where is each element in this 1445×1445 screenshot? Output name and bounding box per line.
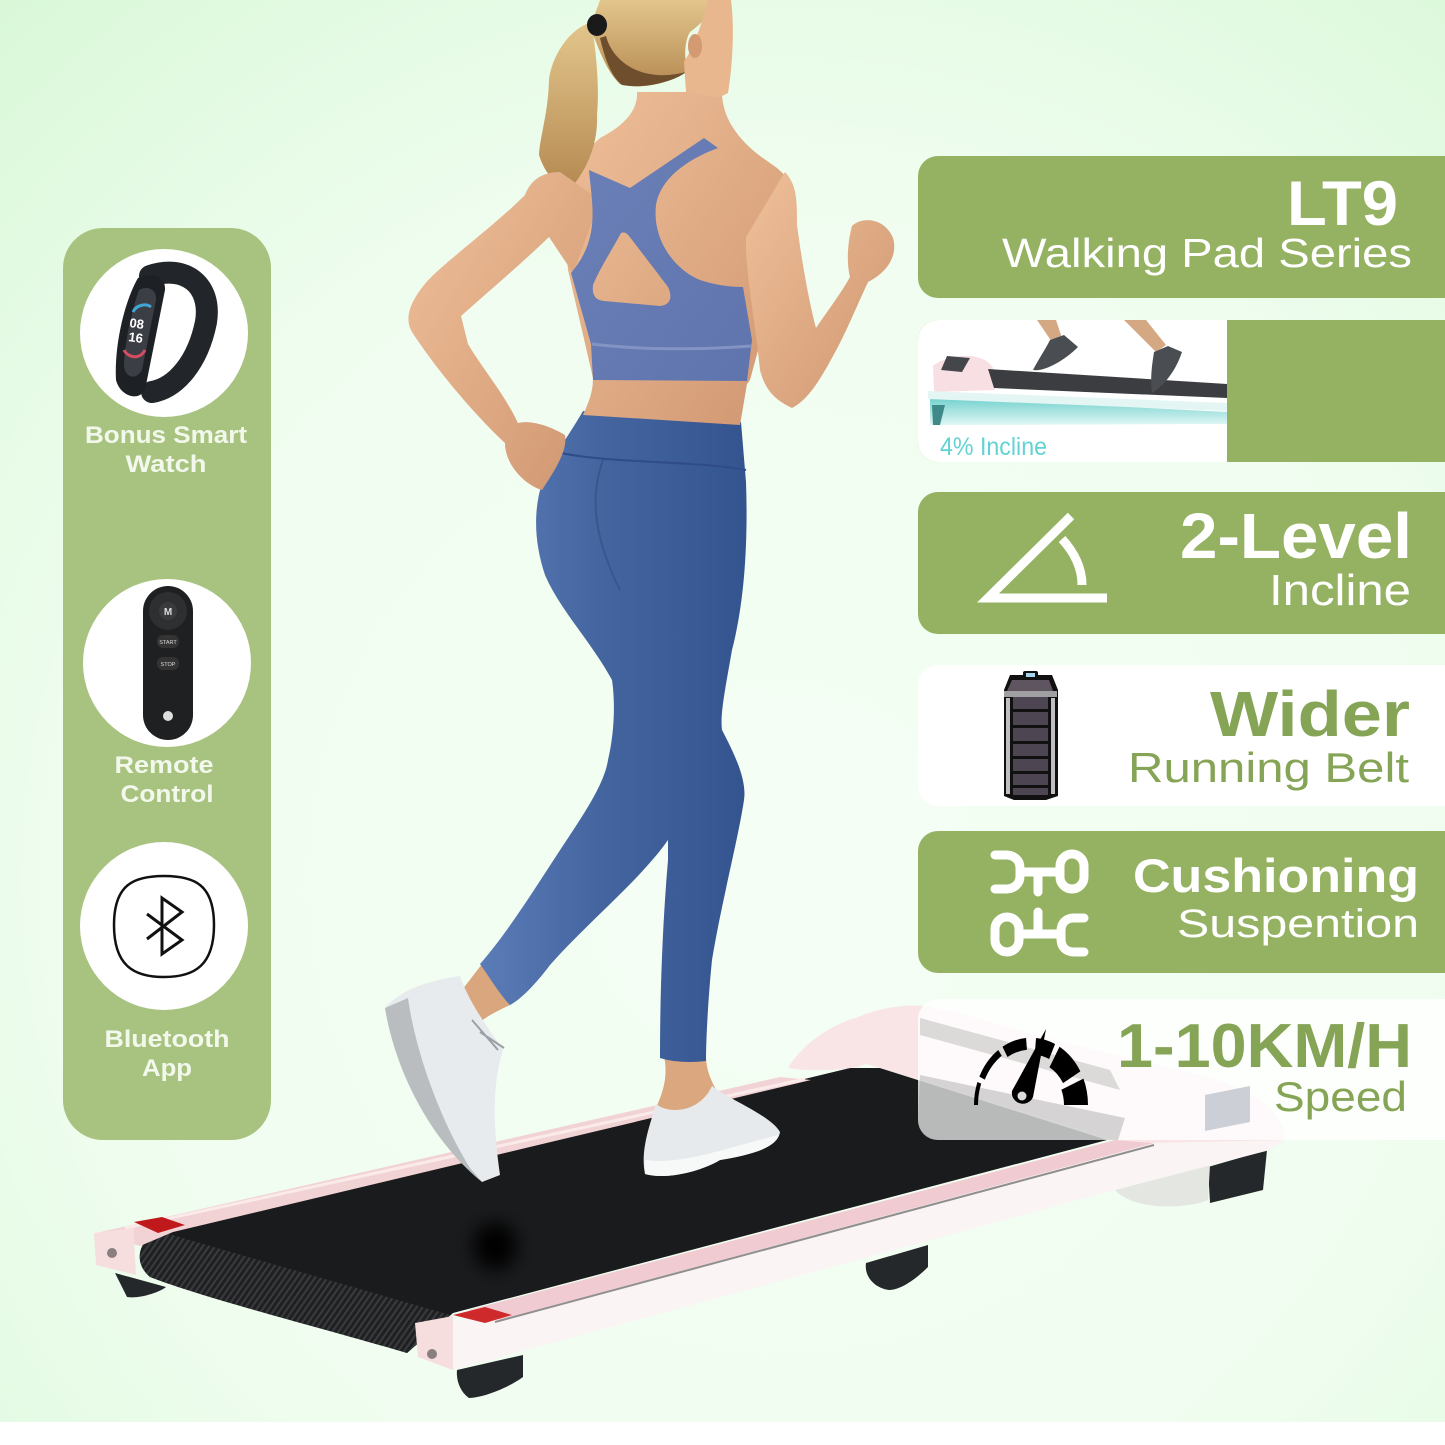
panel: speed: Speed — [1274, 1073, 1407, 1120]
item: remote control — [83, 579, 251, 808]
front ankle — [656, 1056, 722, 1116]
panel: LT9 title: LT9 — [1287, 169, 1398, 239]
icon: speedometer — [976, 1029, 1076, 1105]
face — [684, 0, 733, 98]
photo: inclined treadmill — [928, 320, 1227, 425]
item: bonus smart watch: Bonus Smart — [85, 422, 247, 449]
item: bluetooth app: App — [142, 1055, 192, 1082]
ponytail — [539, 22, 598, 187]
icon: smart watch: 08 — [129, 315, 145, 332]
belt shadow — [473, 1222, 517, 1270]
console — [788, 1005, 1285, 1143]
right arm — [746, 172, 894, 408]
panel: incline photo: 4% Incline — [940, 433, 1047, 461]
hair tie — [587, 14, 607, 36]
console display — [920, 1018, 1120, 1090]
panel: cushioning suspension — [918, 831, 1445, 973]
icon: remote — [143, 586, 193, 740]
running belt — [140, 1068, 1107, 1353]
panel: 2-level incline: Incline — [1269, 566, 1411, 615]
forward leg and shoe — [1124, 320, 1166, 352]
torso skin — [560, 92, 796, 425]
icon: suspension — [995, 854, 1084, 952]
icon: incline angle — [988, 516, 1107, 598]
front shoe — [644, 1086, 780, 1176]
panel: speed: 1-10KM/H — [1117, 1012, 1412, 1081]
illustration: runner — [385, 0, 894, 1182]
panel: speed — [918, 999, 1445, 1140]
leggings — [480, 411, 747, 1062]
panel: 2-level incline — [918, 492, 1445, 634]
far side rail — [96, 1077, 811, 1246]
icon: bluetooth — [114, 876, 214, 977]
item: remote control: Control — [120, 781, 214, 808]
sports top — [571, 138, 752, 381]
badge — [1205, 1086, 1250, 1131]
ear — [688, 34, 702, 58]
panel: cushioning suspension: Cushioning — [1133, 849, 1419, 902]
end caps — [94, 1228, 136, 1275]
panel: LT9 title: Walking Pad Series — [1002, 230, 1412, 276]
item: bonus smart watch — [80, 249, 248, 478]
hair — [590, 0, 722, 86]
icon: smart watch: 16 — [128, 329, 144, 346]
panel: incline photo — [918, 320, 1445, 462]
panel: accessories — [63, 228, 271, 1140]
left arm — [408, 172, 600, 490]
panel: wider running belt: Running Belt — [1128, 744, 1409, 791]
icon: running belt — [1004, 671, 1058, 800]
item: bluetooth app: Bluetooth — [104, 1026, 230, 1053]
front roller — [140, 1233, 450, 1353]
illustration: treadmill — [94, 1005, 1285, 1398]
item: bonus smart watch: Watch — [126, 451, 206, 478]
icon: smart watch — [116, 273, 207, 396]
icon: remote: STOP — [161, 662, 176, 668]
icon: remote: START — [159, 640, 177, 646]
panel: LT9 title — [918, 156, 1445, 298]
item: bluetooth app — [80, 842, 248, 1082]
back shoe — [385, 976, 504, 1182]
panel: 2-level incline: 2-Level — [1180, 500, 1412, 572]
panel: wider running belt: Wider — [1210, 678, 1410, 750]
item: remote control: Remote — [114, 752, 214, 779]
icon: remote: M — [164, 607, 172, 618]
rear leg and shoe — [1037, 320, 1062, 342]
red markers — [134, 1217, 185, 1233]
panel: wider running belt — [918, 665, 1445, 806]
near side frame — [453, 1140, 1285, 1370]
back ankle — [462, 964, 510, 1032]
treadmill feet — [115, 1150, 1267, 1398]
panel: cushioning suspension: Suspention — [1177, 902, 1419, 946]
